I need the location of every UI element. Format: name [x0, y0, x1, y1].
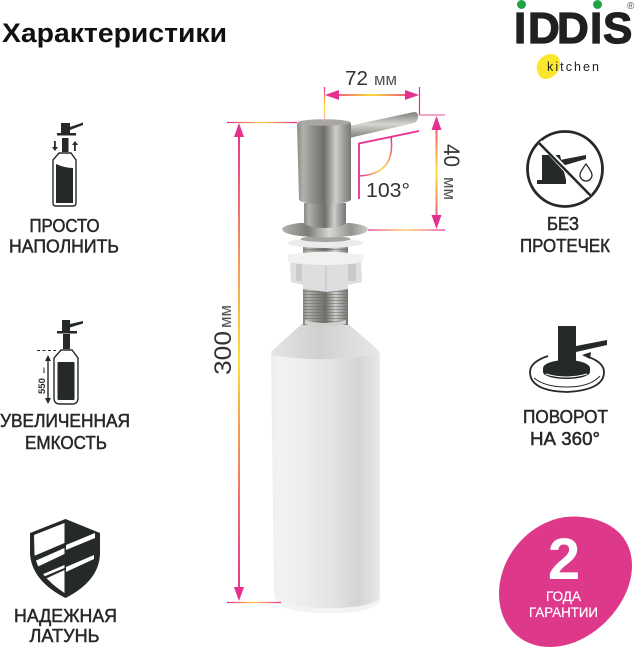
white washer: [288, 236, 363, 248]
lower thread: [303, 288, 348, 327]
label: [523, 407, 608, 449]
flange: [282, 223, 368, 238]
badge blob: [499, 516, 632, 647]
icon: shield: [30, 519, 100, 598]
dimension: 103 degree angle: 103°: [366, 179, 410, 202]
label: [0, 411, 130, 453]
icon: bottle with volume: [37, 320, 83, 404]
label: [14, 606, 117, 646]
neck: [304, 203, 346, 228]
title: Характеристики: [2, 18, 227, 48]
dimension: 103 degree angle: [359, 131, 419, 202]
label: НАПОЛНИТЬ: [9, 236, 119, 256]
logo wordmark: IDDIS: [514, 4, 632, 53]
dimension: 40 mm: [368, 115, 464, 230]
dimension: 300 mm: 300: [210, 331, 237, 375]
badge text: [529, 589, 598, 620]
dimension: 72 mm: 72: [345, 67, 368, 90]
logo green dots: [517, 0, 602, 9]
label: [520, 214, 610, 256]
bottle: [271, 323, 380, 613]
dimension: 300 mm: мм: [216, 305, 235, 328]
logo: IDDIS kitchen: [514, 0, 635, 79]
pump body: [297, 120, 351, 204]
label: НА 360°: [530, 429, 600, 449]
feature: no leaks: [520, 132, 610, 256]
icon: bottle with volume: мл: [41, 367, 46, 373]
badge text: ГАРАНТИИ: [529, 605, 598, 620]
label: БЕЗ: [547, 214, 579, 234]
dimension: 72 mm: [324, 67, 420, 121]
icon: bottle with arrows: [52, 122, 83, 206]
spout: [339, 112, 418, 139]
feature: easy fill: [9, 122, 119, 256]
label: ЕМКОСТЬ: [25, 433, 107, 453]
label: [9, 216, 119, 256]
dimension: 40 mm: мм: [440, 177, 459, 200]
warranty badge: [499, 516, 632, 647]
kitchen label: kitchen: [547, 60, 599, 74]
product: soap dispenser: [271, 112, 418, 613]
dimension: 72 mm: мм: [374, 70, 397, 89]
registered mark: ®: [627, 1, 635, 12]
feature: increased capacity: [0, 320, 130, 453]
label: ПРОСТО: [30, 216, 100, 236]
plastic nut: [288, 252, 363, 292]
feature: reliable brass: [14, 519, 117, 646]
upper thread: [303, 246, 348, 258]
badge text: ГОДА: [546, 589, 581, 604]
icon: bottle with volume: 550: [37, 378, 48, 394]
yellow spot: [537, 54, 560, 79]
label: ЛАТУНЬ: [30, 626, 100, 646]
icon: crossed faucet: [528, 132, 602, 206]
feature: 360 rotation: [523, 326, 608, 449]
dimension: 40 mm: 40: [439, 144, 464, 167]
dimension: 300 mm: [210, 122, 297, 602]
label: НАДЕЖНАЯ: [14, 606, 117, 626]
icon: rotating base: [530, 326, 607, 392]
label: ПРОТЕЧЕК: [520, 236, 610, 256]
label: УВЕЛИЧЕННАЯ: [0, 411, 130, 431]
badge number: 2: [548, 527, 580, 592]
label: ПОВОРОТ: [523, 407, 608, 427]
